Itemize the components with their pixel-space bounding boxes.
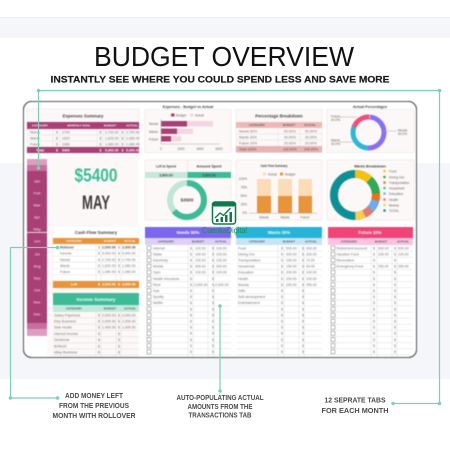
panel: cash flow summary table: $ bbox=[98, 258, 100, 262]
panel: percentage breakdown table: 20.00% bbox=[305, 141, 317, 145]
panel: income summary table: $ bbox=[98, 320, 100, 324]
table: wants 30%: 90.00 bbox=[306, 265, 315, 269]
month name: MAY bbox=[82, 193, 110, 214]
amount remaining: $5400 bbox=[74, 166, 118, 186]
panel: expenses summary: 2,700.00 bbox=[105, 130, 119, 134]
sidebar: month tabs: Sep bbox=[33, 276, 41, 280]
table: needs 50%: 100.00 bbox=[195, 252, 206, 256]
table: needs 50%: 100.00 bbox=[195, 271, 206, 275]
table: future 20%: 200.00 bbox=[378, 252, 389, 256]
panel: cash flow stacked bar chart: Budget bbox=[285, 172, 295, 176]
panel: expenses summary: 2,700.00 bbox=[126, 130, 140, 134]
panel: cash flow summary table: Cash Flow Summary bbox=[75, 230, 118, 235]
panel: left to spend donut: Left to Spend bbox=[156, 164, 177, 168]
table: future 20%: BUDGET bbox=[375, 240, 387, 244]
table: needs 50%: Health Insurance bbox=[153, 277, 180, 281]
panel: expenses summary: 1,080.00 bbox=[126, 136, 140, 140]
sidebar: month tabs: Mar bbox=[34, 202, 41, 208]
table: wants 30%: CATEGORY bbox=[249, 240, 265, 244]
table: needs 50%: Electricity bbox=[153, 258, 168, 262]
panel: percentage breakdown table: 50.00% bbox=[305, 129, 317, 133]
panel: percentage breakdown table: BUDGET bbox=[283, 123, 295, 127]
table: needs 50%: 100.00 bbox=[195, 246, 206, 250]
table: needs 50%: Netflix bbox=[153, 301, 163, 305]
panel: income summary table: $ bbox=[98, 326, 100, 330]
panel: cash flow summary table: $ bbox=[118, 270, 120, 274]
logo wordmark: CuenkaDigital bbox=[202, 225, 247, 235]
table: wants 30%: 300.00 bbox=[286, 252, 297, 256]
panel: percentage breakdown table: 50.00% bbox=[284, 129, 296, 133]
caption: auto-populating: AMOUNTS FROM THE bbox=[188, 402, 253, 411]
panel: wants breakdown donut: Education bbox=[389, 192, 403, 196]
table: wants 30%: 500.00 bbox=[286, 246, 297, 250]
panel: wants breakdown donut: Health bbox=[389, 198, 398, 202]
panel: expenses summary: 1,080.00 bbox=[105, 142, 119, 146]
panel: expenses summary: $ bbox=[56, 130, 58, 134]
panel: percentage breakdown table: 20.00% bbox=[284, 141, 296, 145]
panel: percentage breakdown table bbox=[236, 110, 322, 152]
panel: income summary table: Dividends bbox=[54, 338, 70, 342]
caption: auto-populating: AUTO-POPULATING ACTUAL bbox=[176, 393, 264, 402]
table: future 20%: CATEGORY bbox=[341, 240, 357, 244]
panel: income summary table: ACTUAL bbox=[124, 306, 136, 310]
panel: cash flow summary table: BUDGET bbox=[104, 239, 116, 243]
table: wants 30%: BUDGET bbox=[283, 240, 295, 244]
table: wants 30%: Wants 30% bbox=[268, 230, 290, 235]
panel: budget vs actual bar chart: Actual bbox=[195, 113, 204, 117]
panel: expenses summary: 2700 bbox=[62, 130, 70, 134]
panel: income summary table: BONUS bbox=[54, 344, 67, 348]
panel: expenses summary: $ bbox=[122, 136, 124, 140]
panel: cash flow summary table: 2,000.00 bbox=[122, 246, 136, 250]
panel: expenses summary: 1,080.00 bbox=[126, 142, 140, 146]
table: needs 50%: ACTUAL bbox=[215, 240, 227, 244]
panel: income summary table: $ bbox=[118, 313, 120, 317]
panel: expenses summary: MONTHLY GOAL bbox=[67, 124, 91, 128]
table: needs 50%: 2,000.00 bbox=[194, 283, 208, 287]
panel: cash flow stacked bar chart: Future bbox=[300, 216, 310, 220]
panel: cash flow summary table: 5,400.00 bbox=[102, 252, 116, 256]
panel: wants breakdown donut: Wants Breakdown bbox=[354, 164, 387, 168]
panel: expenses summary: 1080 bbox=[62, 142, 70, 146]
table: needs 50%: Gym bbox=[153, 271, 160, 275]
sidebar: month tabs bbox=[27, 159, 47, 336]
panel: wants breakdown donut: Dining Out bbox=[389, 175, 404, 179]
panel: cash flow stacked bar chart: Actual bbox=[268, 172, 277, 176]
table: needs 50%: 300.00 bbox=[216, 265, 227, 269]
panel: cash flow summary table: 2,700.00 bbox=[122, 258, 136, 262]
panel: income summary table: 1,400.00 bbox=[122, 326, 136, 330]
sidebar: month tabs: Nov bbox=[33, 300, 41, 304]
panel: actual percentages donut: 30.0% bbox=[331, 142, 340, 146]
panel: percentage breakdown table: 100.00% bbox=[304, 148, 318, 152]
table: future 20%: Renovation bbox=[336, 258, 354, 262]
panel: cash flow summary table: 1,620.00 bbox=[102, 264, 116, 268]
panel: expenses summary: 5,400.00 bbox=[105, 148, 119, 152]
panel: percentage breakdown table: Needs 50% bbox=[239, 129, 257, 133]
arrow: center connector to actual column bbox=[218, 304, 222, 393]
table: wants 30%: 250.00 bbox=[306, 283, 317, 287]
table: future 20%: Emergency Fund bbox=[336, 265, 363, 269]
sidebar: month tabs: Jun bbox=[34, 238, 40, 244]
table: needs 50%: 100.00 bbox=[216, 246, 227, 250]
panel: budget vs actual bar chart: Future bbox=[149, 138, 158, 142]
table: needs 50%: 300.00 bbox=[195, 265, 206, 269]
table: wants 30%: $$$$$$$$$$$$$$$$$$ bbox=[281, 246, 283, 354]
panel: expenses summary: Expenses Summary bbox=[63, 114, 104, 118]
caption: monthly tabs bbox=[322, 396, 388, 415]
panel: expenses summary: CATEGORY bbox=[32, 124, 48, 128]
caption: rollover: FROM THE PREVIOUS bbox=[59, 401, 129, 410]
table: future 20%: Retirement Account bbox=[336, 246, 367, 250]
panel: cash flow summary table: 1,080.00 bbox=[122, 264, 136, 268]
panel: percentage breakdown table: 30.00% bbox=[284, 135, 296, 139]
panel: expenses summary: 5400 bbox=[62, 148, 70, 152]
panel: left to spend donut: 3,600.00 bbox=[202, 173, 216, 177]
panel: cash flow summary table: Left bbox=[71, 282, 78, 286]
panel: income summary table: eBay Business bbox=[54, 350, 77, 354]
panel: actual percentages donut: Actual Percentages bbox=[353, 105, 387, 109]
table: wants 30%: Household bbox=[238, 265, 255, 269]
panel: expenses summary: $ bbox=[100, 142, 102, 146]
panel: percentage breakdown table: Future 20% bbox=[239, 141, 257, 145]
table: wants 30%: Self-development bbox=[238, 295, 265, 299]
panel: cash flow summary table: 1,080.00 bbox=[102, 270, 116, 274]
panel: left to spend donut: $3500 bbox=[181, 198, 194, 202]
panel: expenses summary: Wants bbox=[30, 136, 40, 140]
table: needs 50%: $$$$$$$$$$$$$$$$$$ bbox=[190, 246, 192, 354]
table: needs 50%: Mobile bbox=[153, 265, 163, 269]
table: wants 30%: ACTUAL bbox=[305, 240, 317, 244]
sidebar: month tabs: May bbox=[33, 226, 41, 232]
table: future 20%: ACTUAL bbox=[397, 240, 409, 244]
table: future 20%: 100.00 bbox=[398, 252, 409, 256]
panel: budget vs actual bar chart: 0 bbox=[160, 147, 162, 151]
panel: left to spend donut: Amount Spent bbox=[196, 164, 222, 168]
table: future 20%: Future 20% bbox=[358, 230, 382, 235]
panel: cash flow summary table: 2,000.00 bbox=[122, 282, 136, 286]
panel: cash flow summary table: $ bbox=[98, 252, 100, 256]
table: needs 50%: $$$$$$$$$$$$$$$$$$ bbox=[212, 246, 214, 354]
table: needs 50%: Internet bbox=[153, 246, 165, 250]
panel: cash flow summary table: $ bbox=[98, 246, 100, 250]
table: future 20%: $$$$$$$$$$$$$$$$$$ bbox=[373, 246, 375, 354]
panel: income summary table: 1,400.00 bbox=[102, 326, 116, 330]
table: wants 30%: 250.00 bbox=[286, 283, 297, 287]
table: future 20%: 500.00 bbox=[398, 246, 409, 250]
panel: cash flow summary table: $ bbox=[118, 252, 120, 256]
panel: wants breakdown donut: Food bbox=[389, 169, 396, 173]
panel: cash flow stacked bar chart: 0% bbox=[242, 211, 247, 215]
panel: expenses summary: $ bbox=[56, 148, 58, 152]
panel: cash flow summary table: 2,000.00 bbox=[102, 282, 116, 286]
panel: actual percentages donut: Needs bbox=[398, 128, 408, 132]
table: wants 30%: 200.00 bbox=[286, 277, 297, 281]
table: needs 50% bbox=[145, 227, 231, 357]
panel: income summary table: $ bbox=[118, 320, 120, 324]
panel: budget vs actual bar chart: Wants bbox=[149, 130, 158, 134]
table: wants 30%: Dining Out bbox=[238, 252, 255, 256]
panel: budget vs actual bar chart: Expenses - Budget vs Actual bbox=[163, 105, 213, 109]
logo icon: spreadsheet with rising chart bbox=[212, 202, 236, 224]
panel: budget vs actual bar chart: 2000 bbox=[177, 147, 185, 151]
table: wants 30%: Entertainment bbox=[238, 301, 260, 305]
panel: expenses summary: BUDGET bbox=[104, 124, 116, 128]
panel: budget vs actual bar chart: Needs bbox=[149, 122, 159, 126]
table: needs 50%: CATEGORY bbox=[158, 240, 174, 244]
table: needs 50%: Gas bbox=[153, 289, 160, 293]
panel: cash flow stacked bar chart: 75% bbox=[241, 186, 247, 190]
panel: expenses summary: Future bbox=[30, 142, 40, 146]
sidebar: month tabs: Feb bbox=[34, 190, 41, 196]
panel: cash flow summary table: Income bbox=[60, 252, 72, 256]
panel: cash flow stacked bar chart: Wants bbox=[281, 216, 290, 220]
panel: cash flow summary table bbox=[53, 226, 139, 288]
panel: cash flow summary table: CATEGORY bbox=[66, 239, 82, 243]
panel: percentage breakdown table: ACTUAL bbox=[304, 123, 316, 127]
table: wants 30%: 200.00 bbox=[286, 271, 297, 275]
panel: cash flow summary table: $ bbox=[118, 246, 120, 250]
panel: income summary table: BUDGET bbox=[104, 306, 116, 310]
panel: cash flow summary table: $ bbox=[118, 264, 120, 268]
panel: income summary table: Salary Paycheck bbox=[54, 313, 80, 317]
table: wants 30%: 100.00 bbox=[306, 271, 317, 275]
panel: income summary table: 2,000.00 bbox=[122, 313, 136, 317]
panel: wants breakdown donut: TOTAL bbox=[389, 209, 399, 213]
panel: budget vs actual bar chart: 6000 bbox=[215, 147, 223, 151]
table: wants 30%: Gifts bbox=[238, 289, 245, 293]
panel: percentage breakdown table: Wants 30% bbox=[239, 135, 257, 139]
panel: expenses summary: ACTUAL bbox=[126, 124, 138, 128]
panel: expenses summary: $ bbox=[100, 130, 102, 134]
panel: expenses summary: $ bbox=[56, 136, 58, 140]
panel: cash flow summary table: 2,000.00 bbox=[102, 246, 116, 250]
table: wants 30%: Food bbox=[238, 246, 246, 250]
panel: actual percentages donut: Wants bbox=[331, 138, 340, 142]
panel: cash flow stacked bar chart: Cash Flow Summary bbox=[260, 164, 288, 168]
caption: rollover: MONTH WITH ROLLOVER bbox=[52, 411, 136, 420]
panel: budget vs actual bar chart: 4000 bbox=[196, 147, 204, 151]
panel: cash flow stacked bar chart: 25% bbox=[241, 202, 247, 206]
panel: income summary table: Side Hustle bbox=[54, 326, 72, 330]
sidebar: month tabs: Dec bbox=[33, 312, 41, 316]
panel: cash flow stacked bar chart: 100% bbox=[239, 177, 247, 181]
panel: budget vs actual bar chart: Budget bbox=[176, 113, 186, 117]
panel: actual percentages donut: 50.0% bbox=[398, 132, 407, 136]
panel: wants breakdown donut bbox=[327, 160, 414, 220]
sidebar: month tabs: Jan bbox=[34, 178, 40, 184]
panel: cash flow summary table: 5,400.00 bbox=[122, 252, 136, 256]
panel: actual percentages donut: 20.0% bbox=[331, 118, 340, 122]
panel: percentage breakdown table: Percentage Breakdown bbox=[255, 114, 303, 118]
panel: expenses summary: 5,400.00 bbox=[126, 148, 140, 152]
table: needs 50%: Needs 50% bbox=[177, 230, 200, 235]
table: needs 50%: 100.00 bbox=[216, 271, 227, 275]
table: wants 30%: $$$$$$$$$$$$$$$$$$ bbox=[302, 246, 304, 354]
panel: cash flow summary table: ACTUAL bbox=[124, 239, 136, 243]
panel: cash flow stacked bar chart: Needs bbox=[259, 216, 269, 220]
table: wants 30% bbox=[236, 227, 322, 357]
panel: cash flow summary table: $ bbox=[118, 258, 120, 262]
table: wants 30%: Health bbox=[238, 277, 248, 281]
arrow: top connector to month tabs bbox=[37, 89, 441, 170]
panel: cash flow summary table: $ bbox=[98, 270, 100, 274]
panel: income summary table bbox=[53, 293, 139, 357]
panel: income summary table: Interest Income bbox=[54, 332, 78, 336]
panel: cash flow summary table: $ bbox=[98, 282, 100, 286]
panel: income summary table: 2,000.00 bbox=[102, 313, 116, 317]
sidebar: month tabs: Oct bbox=[34, 288, 41, 292]
panel: income summary table: CATEGORY bbox=[66, 306, 82, 310]
panel: income summary table: $ bbox=[98, 313, 100, 317]
panel: wants breakdown donut: Household bbox=[389, 186, 404, 190]
table: future 20%: 250.00 bbox=[398, 265, 409, 269]
panel: cash flow stacked bar chart bbox=[236, 160, 322, 220]
panel: cash flow summary table: Wants bbox=[60, 264, 70, 268]
table: needs 50%: BUDGET bbox=[192, 240, 204, 244]
table: wants 30%: Beauty bbox=[238, 283, 249, 287]
panel: cash flow summary table: Future bbox=[60, 270, 70, 274]
panel: percentage breakdown table: 30.00% bbox=[305, 135, 317, 139]
panel: cash flow summary table: 1,080.00 bbox=[122, 270, 136, 274]
table: wants 30%: 150.00 bbox=[286, 258, 297, 262]
panel: income summary table: 2,000.00 bbox=[102, 320, 116, 324]
table: future 20%: Vacation Fund bbox=[336, 252, 359, 256]
panel: percentage breakdown table: Total 100% bbox=[239, 148, 256, 152]
table: needs 50%: 100.00 bbox=[216, 252, 227, 256]
panel: left to spend donut: 3,800.00 bbox=[159, 173, 173, 177]
panel: cash flow summary table: Needs bbox=[60, 258, 70, 262]
panel: actual percentages donut bbox=[327, 105, 414, 152]
table: future 20%: $$$$$$$$$$$$$$$$$$ bbox=[394, 246, 396, 354]
table: future 20%: 500.00 bbox=[378, 246, 389, 250]
panel: expenses summary: 1,620.00 bbox=[105, 136, 119, 140]
dashboard screenshot bbox=[24, 102, 416, 358]
table: future 20%: 250.00 bbox=[378, 265, 389, 269]
table: needs 50%: 100.00 bbox=[195, 258, 206, 262]
panel: cash flow stacked bar chart: 50% bbox=[241, 194, 247, 198]
panel: cash flow summary table: $ bbox=[98, 264, 100, 268]
sidebar: month tabs: Aug bbox=[33, 264, 41, 268]
table: wants 30%: 150.00 bbox=[286, 265, 297, 269]
panel: income summary table: $ bbox=[118, 326, 120, 330]
panel: expenses summary: $ bbox=[122, 130, 124, 134]
table: needs 50%: 100.00 bbox=[216, 258, 227, 262]
caption: monthly tabs: 12 SEPRATE TABS bbox=[324, 396, 386, 404]
panel: income summary table: Income Summary bbox=[76, 297, 116, 302]
caption: auto-populating: TRANSACTIONS TAB bbox=[188, 410, 252, 420]
panel: left to spend donut bbox=[145, 160, 231, 220]
table: wants 30%: 300.00 bbox=[306, 252, 317, 256]
panel: income summary table: $$$$$$$$ bbox=[98, 332, 120, 354]
panel: expenses summary: $ bbox=[122, 142, 124, 146]
table: wants 30%: 100.00 bbox=[306, 277, 317, 281]
panel: expenses summary: Needs bbox=[30, 130, 40, 134]
caption: rollover: ADD MONEY LEFT bbox=[65, 391, 124, 400]
panel: expenses summary: 1620 bbox=[62, 136, 70, 140]
subtitle: INSTANTLY SEE WHERE YOU COULD SPEND LESS AND SAVE MORE bbox=[50, 74, 390, 86]
table: needs 50%: Spotify bbox=[153, 295, 164, 299]
title: BUDGET OVERVIEW bbox=[94, 41, 355, 72]
panel: wants breakdown donut: Transportation bbox=[389, 181, 410, 185]
panel: income summary table: 2,000.00 bbox=[122, 320, 136, 324]
table: wants 30%: 300.00 bbox=[306, 246, 317, 250]
table: needs 50%: Rent bbox=[153, 283, 160, 287]
caption: rollover bbox=[52, 391, 136, 420]
table: needs 50%: Water bbox=[153, 252, 163, 256]
panel: cash flow summary table: $ bbox=[118, 282, 120, 286]
sidebar: month tabs: Apr bbox=[34, 214, 41, 220]
panel: wants breakdown donut: Beauty bbox=[389, 203, 399, 207]
arrow: right connector to tabs caption bbox=[391, 90, 441, 405]
caption: monthly tabs: FOR EACH MONTH bbox=[322, 406, 388, 415]
panel: expenses summary bbox=[27, 109, 140, 153]
panel: actual percentages donut: Future bbox=[331, 114, 340, 118]
sidebar: month tabs: Jul bbox=[34, 252, 40, 256]
panel: expenses summary: $ bbox=[100, 148, 102, 152]
panel: budget vs actual bar chart bbox=[145, 105, 231, 152]
caption: auto-populating bbox=[176, 393, 264, 420]
table: future 20% bbox=[328, 227, 413, 357]
table: wants 30%: Transportation bbox=[238, 258, 260, 262]
panel: expenses summary: $ bbox=[122, 148, 124, 152]
arrow: left connector to rollover row bbox=[9, 246, 59, 400]
table: wants 30%: 70.00 bbox=[306, 258, 315, 262]
table: needs 50%: 2,000.00 bbox=[215, 283, 229, 287]
panel: expenses summary: $ bbox=[100, 136, 102, 140]
panel: expenses summary: $ bbox=[56, 142, 58, 146]
panel: income summary table: Etsy Business bbox=[54, 320, 76, 324]
panel: percentage breakdown table: 100.00% bbox=[283, 148, 297, 152]
panel: cash flow summary table: 2,700.00 bbox=[102, 258, 116, 262]
panel: expenses summary: Total bbox=[36, 148, 44, 152]
panel: percentage breakdown table: CATEGORY bbox=[249, 123, 265, 127]
table: wants 30%: Education bbox=[238, 271, 254, 275]
panel: cash flow summary table: Rollover bbox=[60, 246, 75, 250]
